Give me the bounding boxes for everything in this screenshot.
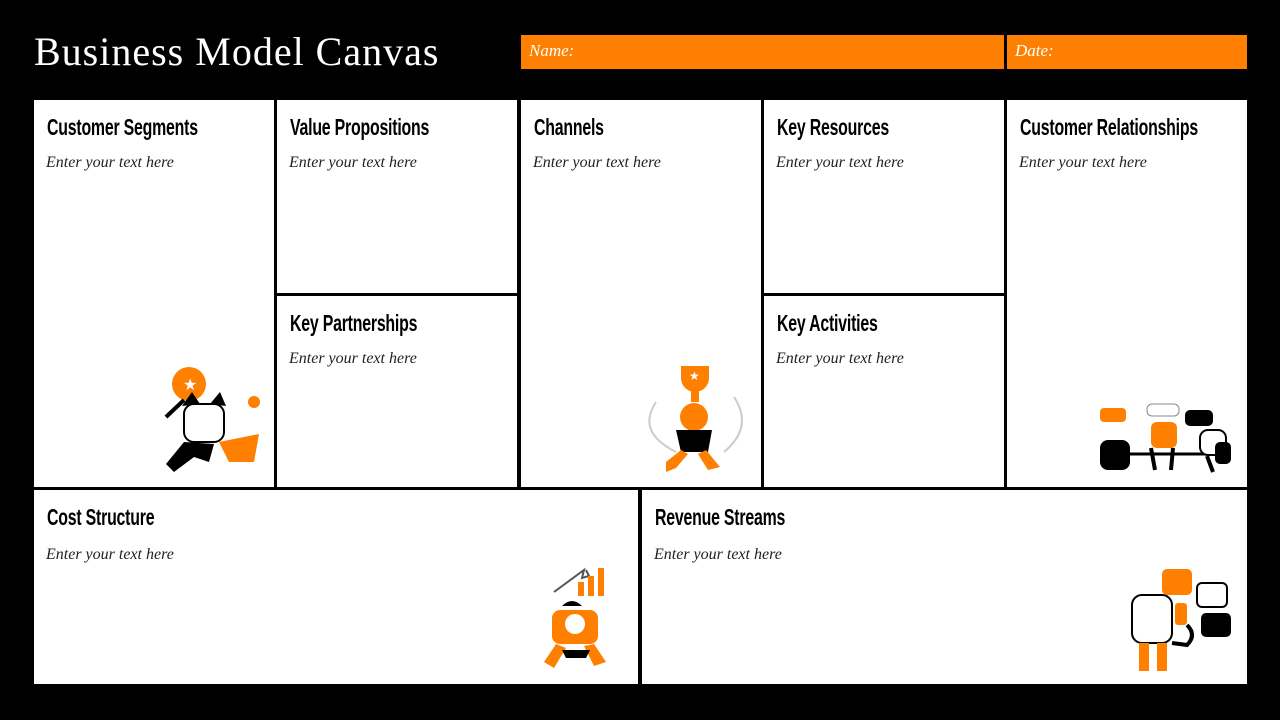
panel: channels: Channels <box>534 114 604 140</box>
panel: customer segments: Enter your text here <box>46 154 174 171</box>
date field <box>1007 35 1247 69</box>
icon: cat with cup: ★ <box>689 369 700 383</box>
panel: customer relationships <box>1007 100 1247 487</box>
panel: key activities <box>764 296 1004 487</box>
panel: cost structure: Cost Structure <box>47 504 154 530</box>
icon: robot with growth chart <box>544 568 606 668</box>
panel: key partnerships: Enter your text here <box>289 350 417 367</box>
panel: cost structure <box>34 490 638 684</box>
panel: key partnerships: Key Partnerships <box>290 310 417 336</box>
title: Business Model Canvas <box>34 29 439 74</box>
icon: character with social icons <box>1131 569 1231 671</box>
panel: key resources: Key Resources <box>777 114 889 140</box>
panel: customer relationships: Enter your text here <box>1019 154 1147 171</box>
panel: value propositions <box>277 100 517 293</box>
date field: Date: <box>1015 41 1054 60</box>
panel: value propositions: Enter your text here <box>289 154 417 171</box>
panel: key partnerships <box>277 296 517 487</box>
panel: key resources <box>764 100 1004 293</box>
panel: channels <box>521 100 761 487</box>
panel: value propositions: Value Propositions <box>290 114 429 140</box>
panel: key resources: Enter your text here <box>776 154 904 171</box>
panel: customer segments <box>34 100 274 487</box>
icon: cat with trophy: ★ <box>183 377 197 394</box>
panel: key activities: Enter your text here <box>776 350 904 367</box>
icon: team meeting <box>1100 404 1231 473</box>
name field <box>521 35 1004 69</box>
icon: cat with trophy <box>164 367 260 472</box>
name field: Name: <box>529 41 574 60</box>
panel: customer segments: Customer Segments <box>47 114 198 140</box>
panel: key activities: Key Activities <box>777 310 878 336</box>
panel: revenue streams: Enter your text here <box>654 546 782 563</box>
panel: cost structure: Enter your text here <box>46 546 174 563</box>
panel: customer relationships: Customer Relationships <box>1020 114 1198 140</box>
icon: cat with cup <box>648 366 743 472</box>
panel: revenue streams <box>642 490 1247 684</box>
panel: channels: Enter your text here <box>533 154 661 171</box>
panel: revenue streams: Revenue Streams <box>655 504 785 530</box>
